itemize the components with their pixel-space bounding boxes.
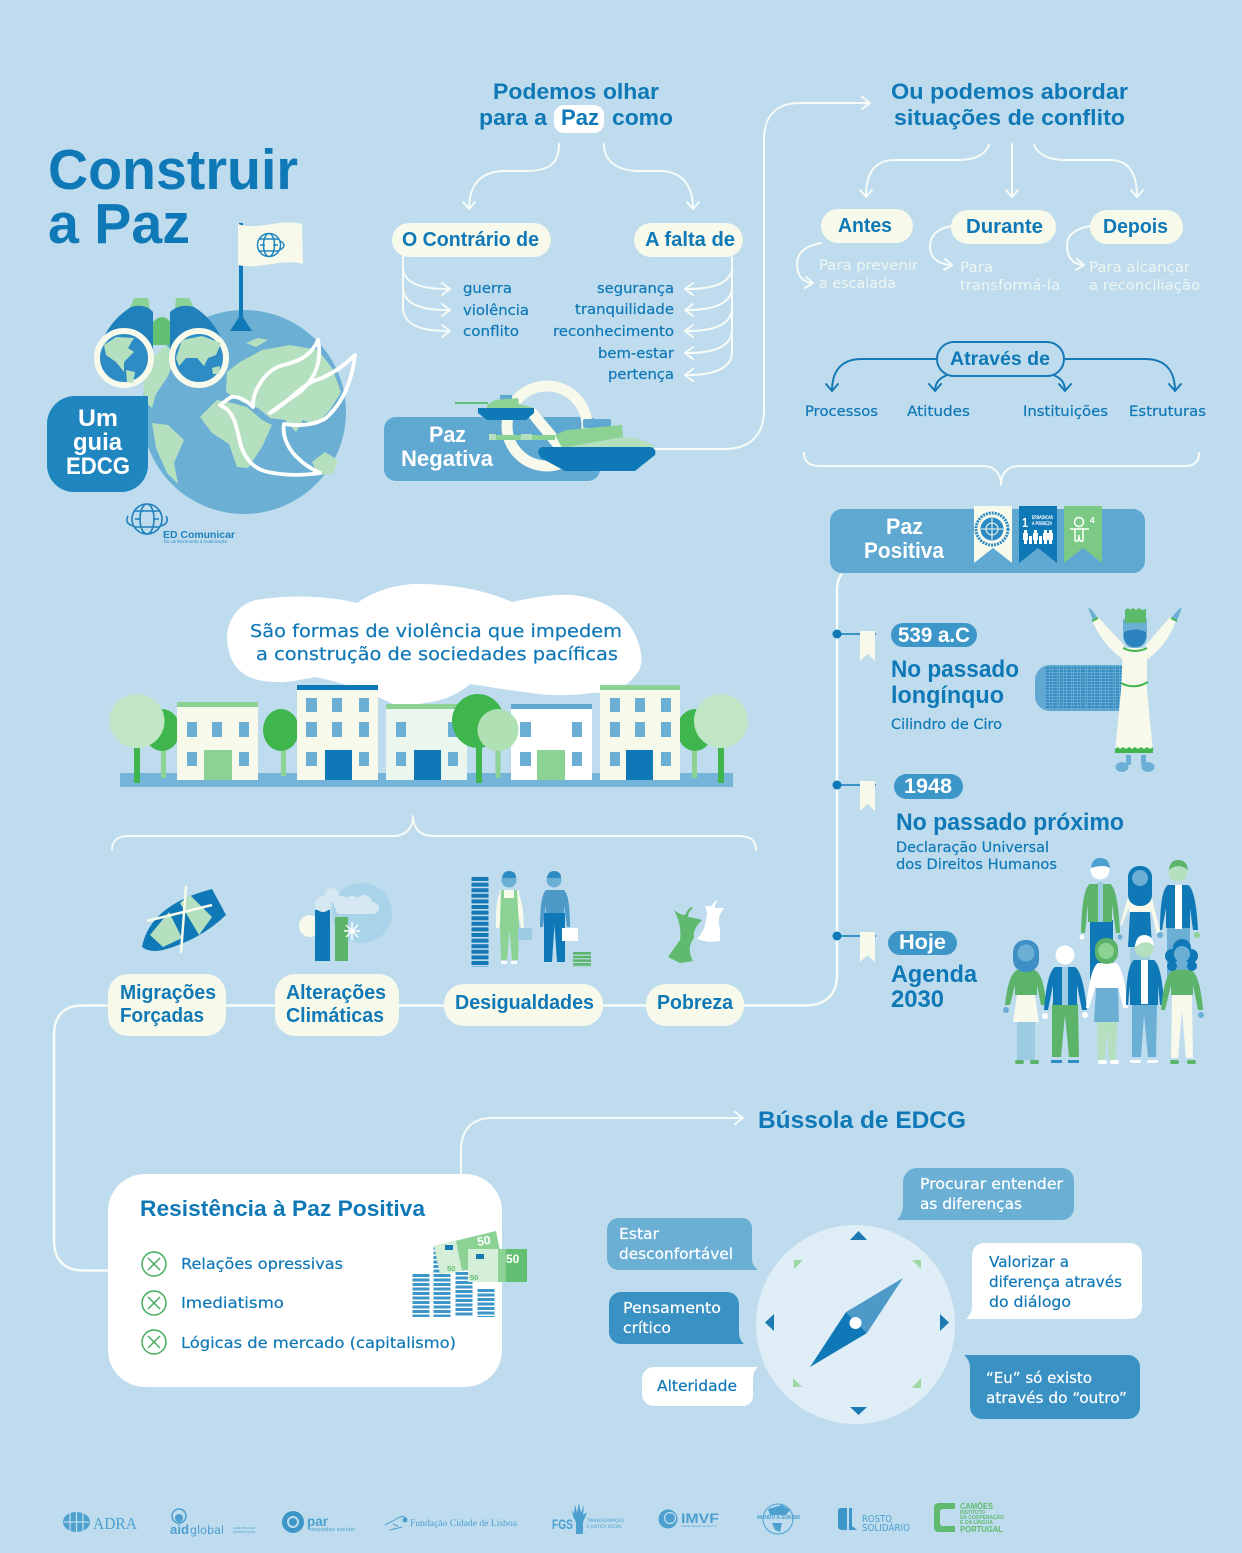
- logo: Mundo a Sorrir: [757, 1504, 800, 1534]
- arrows: antes durante depois: [860, 144, 1143, 197]
- compass needle: [810, 1278, 903, 1367]
- illustration: city street: [110, 685, 748, 787]
- panel: Paz Positiva: Positiva: [864, 538, 945, 563]
- pill: Alterações Climáticas: Climáticas: [286, 1005, 384, 1027]
- heading: Ou podemos abordar situações de conflito: Ou podemos abordar: [891, 79, 1128, 104]
- bubble: Eu só existo através do outro: “Eu” só existo: [986, 1369, 1092, 1387]
- logo: IMVF: IMVF: [681, 1510, 719, 1526]
- panel: Depois: [1067, 210, 1200, 294]
- icon: SDG 4 banner: 4: [1090, 515, 1095, 525]
- building 1: [177, 702, 258, 780]
- timeline entry: 539 a.C: Cilindro de Ciro: [891, 717, 1002, 733]
- panel: O Contrário de: guerra: [463, 281, 512, 297]
- diagram: Através de: Através de: [950, 348, 1050, 370]
- icon: dove: [220, 340, 355, 475]
- timeline entry: Hoje: Hoje: [899, 931, 946, 954]
- connector: Paz Negativa to conflict heading: [650, 97, 870, 449]
- logo: Rosto Solidário: [838, 1508, 910, 1534]
- bubble: Valorizar a diferença através do diálogo: [966, 1243, 1142, 1319]
- building 3: [386, 704, 467, 780]
- icon: SDG 4 banner: [1064, 506, 1102, 563]
- panel: A falta de: segurança: [597, 281, 674, 297]
- heading: Ou podemos abordar situações de conflito: [891, 79, 1128, 130]
- heading: Bússola de EDCG: Bússola de EDCG: [758, 1107, 966, 1134]
- logo: ED Comunicar: ED Comunicar: [163, 529, 235, 541]
- panel: O Contrário de: [392, 223, 551, 340]
- logo: FGS: [552, 1503, 624, 1534]
- icon: flag: [230, 222, 303, 331]
- heading: Ou podemos abordar situações de conflito: situações de conflito: [894, 105, 1125, 130]
- pill: Desigualdades: Desigualdades: [455, 992, 594, 1014]
- pill: Migrações Forçadas: Forçadas: [120, 1005, 204, 1027]
- logo: Mundo a Sorrir: MUNDO A SORRIR: [757, 1515, 800, 1521]
- bubble: Pensamento crítico: [609, 1292, 744, 1344]
- badge: Um guia EDCG: [47, 396, 148, 492]
- bubble: Estar desconfortável: [607, 1218, 758, 1270]
- item: Imediatismo: Imediatismo: [181, 1294, 284, 1312]
- icon: binoculars: [97, 298, 226, 385]
- arrow: resistance to compass: [461, 1112, 743, 1174]
- icon: no sign with tanks: [455, 386, 655, 471]
- timeline entry: Hoje: Agenda: [891, 961, 978, 988]
- panel: A falta de: [553, 223, 743, 383]
- panel: Depois: a reconciliação: [1089, 278, 1200, 294]
- heading: Podemos olhar para a Paz como: para a: [479, 105, 548, 130]
- timeline entry: 539 a.C: [832, 623, 1019, 733]
- diagram: Através de: [805, 342, 1206, 420]
- trees in front: [110, 694, 748, 783]
- panel: Paz Negativa: Negativa: [401, 446, 494, 471]
- panel: Paz Positiva: Paz: [886, 514, 923, 539]
- logo: aidglobal: DESENVOLVER: [233, 1530, 255, 1534]
- icon: UN banner: [974, 506, 1012, 563]
- logo: par: respostas sociais: [309, 1527, 355, 1533]
- panel: O Contrário de: conflito: [463, 324, 519, 340]
- panel: Resistência à Paz Positiva: Resistência à Paz Positiva: [140, 1196, 426, 1221]
- logo: Camões: INSTITUTO: [960, 1510, 985, 1516]
- icon: SDG 1 banner: A POBREZA: [1032, 521, 1053, 527]
- bubble: Procurar entender as diferenças: [897, 1168, 1074, 1220]
- diagram: Através de: Processos: [805, 404, 878, 420]
- panel: Durante: [930, 210, 1060, 294]
- logo: aidglobal: aid: [170, 1523, 189, 1537]
- bubble: Eu só existo através do outro: [964, 1355, 1140, 1419]
- trees behind buildings: [144, 709, 713, 778]
- heading: Podemos olhar para a Paz como: [479, 79, 673, 133]
- pill: Desigualdades: [444, 984, 603, 1026]
- panel: Depois: Para alcançar: [1089, 260, 1190, 276]
- panel: A falta de: A falta de: [645, 229, 735, 251]
- building 2: [297, 685, 378, 780]
- illustration: Cyrus figure: [1088, 607, 1182, 772]
- timeline entry: 1948: No passado próximo: [896, 809, 1124, 836]
- speech cloud: [227, 584, 641, 705]
- icon: chimneys and climate: [299, 883, 392, 961]
- bubble: Alteridade: [642, 1367, 758, 1406]
- timeline entry: 539 a.C: longínquo: [891, 682, 1004, 709]
- icon: money stacks and banknotes: 50: [470, 1273, 478, 1282]
- speech cloud: São formas de violência que impedem: [250, 621, 622, 642]
- timeline entry: 539 a.C: 539 a.C: [898, 624, 970, 647]
- panel: A falta de: bem-estar: [598, 346, 674, 362]
- panel: Paz Negativa: [384, 386, 655, 481]
- pill: Alterações Climáticas: [275, 974, 399, 1036]
- item: Lógicas de mercado: [142, 1330, 456, 1354]
- bubble: Pensamento crítico: Pensamento: [623, 1299, 721, 1317]
- panel: Paz Positiva: [830, 506, 1145, 573]
- arrows: Paz to two branches: [463, 144, 699, 209]
- panel: Antes: Para prevenir: [819, 258, 918, 274]
- icon: SDG 1 banner: 1: [1022, 515, 1028, 530]
- panel: Durante: Para: [960, 260, 993, 276]
- item: Relações opressivas: [142, 1252, 343, 1276]
- item: Lógicas de mercado: Lógicas de mercado (capitalismo): [181, 1334, 456, 1352]
- arrows: falta list: [685, 257, 732, 381]
- panel: Antes: Antes: [838, 215, 892, 237]
- icon: money stacks and banknotes: 50: [447, 1264, 455, 1273]
- icon: apple cores: [668, 900, 724, 963]
- panel: O Contrário de: violência: [463, 303, 529, 319]
- icon: SDG 1 banner: ERRADICAR: [1032, 515, 1053, 521]
- badge: Um guia EDCG: guia: [73, 429, 123, 456]
- logo: aidglobal: [170, 1509, 255, 1537]
- panel: Depois: Depois: [1103, 216, 1168, 238]
- logo: ED Comunicar: [127, 504, 235, 544]
- logo: ADRA: ADRA: [93, 1514, 138, 1533]
- logo: Fundação Cidade de Lisboa: Fundação Cidade de Lisboa: [410, 1518, 517, 1528]
- bubble: Valorizar a diferença através do diálogo: do diálogo: [989, 1293, 1071, 1311]
- logo: IMVF: Instituto Marquês de Valle Flôr: [681, 1524, 718, 1528]
- timeline entry: 539 a.C: No passado: [891, 656, 1019, 683]
- logo: ADRA: [63, 1512, 138, 1533]
- panel: Resistência à Paz Positiva: [108, 1174, 527, 1387]
- diagram: Através de: Estruturas: [1129, 404, 1206, 420]
- bubble: Alteridade: Alteridade: [657, 1377, 737, 1395]
- bubble: Valorizar a diferença através do diálogo: Valorizar a: [989, 1253, 1069, 1271]
- pill: Pobreza: [646, 984, 744, 1026]
- logo: IMVF: [658, 1510, 719, 1528]
- heading: Podemos olhar para a Paz como: Podemos olhar: [493, 79, 659, 104]
- bubble: Eu só existo através do outro: através do “outro”: [986, 1389, 1127, 1407]
- logo: Rosto Solidário: ROSTO: [862, 1514, 892, 1525]
- speech cloud: a construção de sociedades pacíficas: [256, 644, 618, 665]
- pill: Pobreza: Pobreza: [657, 992, 734, 1014]
- title: a Paz: [48, 192, 190, 256]
- panel: O Contrário de: O Contrário de: [402, 229, 539, 251]
- bubble: Procurar entender as diferenças: as diferenças: [920, 1195, 1022, 1213]
- panel: Durante: Durante: [966, 216, 1043, 238]
- timeline entry: 1948: 1948: [904, 775, 952, 798]
- pill: Migrações Forçadas: Migrações: [120, 982, 216, 1004]
- timeline entry: 1948: [832, 774, 1124, 873]
- bubble: Estar desconfortável: Estar: [619, 1225, 660, 1243]
- logo: FGS: FGS: [552, 1517, 573, 1532]
- icon: money stacks and banknotes: 50: [476, 1233, 492, 1249]
- icon: money stacks and banknotes: [421, 1231, 527, 1317]
- timeline entry: Hoje: [832, 931, 978, 1013]
- bubble: Estar desconfortável: desconfortável: [619, 1245, 733, 1263]
- icon: inequality figures: [480, 871, 582, 967]
- icon: SDG 1 banner: [1019, 506, 1057, 563]
- panel: Durante: transformá-la: [960, 278, 1060, 294]
- compass dial: [756, 1225, 955, 1424]
- logo: Rosto Solidário: SOLIDÁRIO: [862, 1522, 910, 1534]
- logo: Fundação Cidade de Lisboa: [385, 1516, 517, 1530]
- item: Relações opressivas: Relações opressivas: [181, 1255, 343, 1273]
- logo: Camões: E DA LÍNGUA: [960, 1518, 993, 1526]
- logo: aidglobal: global: [190, 1523, 224, 1537]
- building 5: [600, 685, 680, 780]
- heading: Podemos olhar para a Paz como: Paz: [561, 105, 599, 130]
- timeline entry: Hoje: 2030: [891, 986, 944, 1013]
- illustration: Cyrus cylinder: [1035, 665, 1135, 711]
- diagram: Através de: Atitudes: [907, 404, 970, 420]
- icon: boat: [142, 886, 226, 953]
- illustration: globe with binoculars, flag and dove: [97, 222, 355, 514]
- logo: par: [282, 1511, 355, 1533]
- pill: Migrações Forçadas: [108, 974, 226, 1036]
- timeline entry: 1948: Declaração Universal: [896, 840, 1049, 856]
- logo: Camões: PORTUGAL: [960, 1524, 1003, 1534]
- panel: A falta de: reconhecimento: [553, 324, 674, 340]
- badge: Um guia EDCG: EDCG: [66, 453, 130, 480]
- logo: Camões: CAMÕES: [960, 1501, 993, 1511]
- logo: Camões: [934, 1501, 1004, 1534]
- diagram: Através de: Instituições: [1023, 404, 1108, 420]
- bubble: Procurar entender as diferenças: Procurar entender: [920, 1175, 1064, 1193]
- logo: aidglobal: AGIR EDUCAR: [233, 1526, 255, 1530]
- panel: Antes: a escalada: [819, 276, 896, 292]
- pill: Alterações Climáticas: Alterações: [286, 982, 386, 1004]
- title: [48, 138, 298, 256]
- panel: A falta de: tranquilidade: [575, 302, 674, 318]
- panel: Paz Negativa: Paz: [429, 422, 466, 447]
- title: Construir: [48, 138, 298, 202]
- building 4: [511, 704, 592, 780]
- panel: A falta de: pertença: [608, 367, 674, 383]
- logo: ED Comunicar: Do conhecimento à mobilização: [164, 539, 228, 544]
- illustration: group of people: [1003, 858, 1204, 1064]
- bubble: Valorizar a diferença através do diálogo: diferença através: [989, 1273, 1122, 1291]
- logo: par: par: [307, 1513, 329, 1529]
- logo: FGS: TRANSFORMAÇÃO: [586, 1517, 624, 1524]
- icon: money stacks and banknotes: 50: [506, 1252, 520, 1266]
- panel: Antes: [797, 209, 918, 292]
- arrows: contrário list: [403, 257, 450, 337]
- bubble: Pensamento crítico: crítico: [623, 1319, 671, 1337]
- heading: Podemos olhar para a Paz como: como: [612, 105, 673, 130]
- timeline entry: 1948: dos Direitos Humanos: [896, 857, 1057, 873]
- main timeline and connector line: [54, 574, 842, 1270]
- logo: Camões: DA COOPERAÇÃO: [960, 1514, 1004, 1521]
- logo: FGS: E JUSTIÇA SOCIAL: [587, 1524, 622, 1530]
- badge: Um guia EDCG: Um: [78, 405, 118, 432]
- item: Imediatismo: [142, 1291, 284, 1315]
